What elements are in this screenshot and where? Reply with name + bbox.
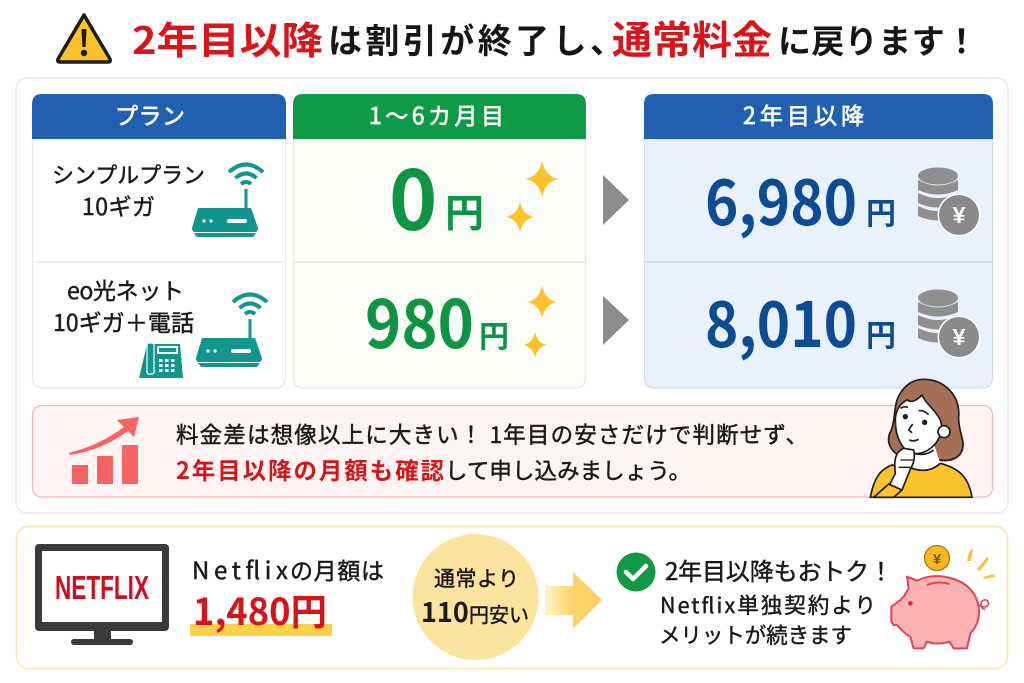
- arrow: first row: [603, 175, 629, 225]
- green header: [293, 94, 586, 139]
- panel: plan column: [32, 94, 993, 497]
- icon: thinking woman: [870, 379, 972, 497]
- icon: wifi router and phone: [139, 294, 267, 378]
- netflix price text: Netflix: [192, 551, 288, 586]
- netflix price text: 1,480円: [193, 582, 327, 636]
- highlight underline: [190, 624, 332, 636]
- netflix price text: [190, 551, 384, 636]
- blue header: 2年目以降: [743, 97, 864, 131]
- icon: green check: [616, 552, 656, 592]
- plan row: eo net: eo光ネット: [67, 272, 184, 306]
- benefit text: メリットが続きます: [659, 619, 852, 650]
- benefit text: 2年目以降もおトク！: [665, 552, 893, 587]
- icon: sparkles: [506, 161, 558, 232]
- price: 6,980 yen: 6,980: [705, 153, 857, 243]
- panel: second year column: [644, 94, 993, 388]
- callout: price gap warning: [32, 379, 992, 497]
- icon: warning triangle: [58, 15, 110, 62]
- plan header: [32, 94, 286, 139]
- icon: sparkles: [523, 286, 556, 358]
- panel: netflix: [16, 526, 1008, 668]
- icon: coins: [918, 290, 980, 358]
- plan row: eo net: 10ギガ＋電話: [53, 304, 194, 338]
- badge: 110 yen cheaper: 通常より: [434, 563, 519, 593]
- price: 980 yen: 円: [479, 312, 509, 356]
- netflix price text: の月額は: [290, 552, 384, 586]
- price: 6,980 yen: 円: [866, 189, 896, 233]
- benefit text: Netflix単独契約より: [660, 589, 876, 620]
- title text: 通常料金: [612, 10, 772, 66]
- callout text: [176, 418, 808, 486]
- plan row: simple plan: 10ギガ: [82, 188, 155, 222]
- price: 8,010 yen: 円: [866, 311, 896, 355]
- arrow: second row: [603, 296, 629, 345]
- title text: 2年目以降: [132, 10, 323, 65]
- icon: piggy bank: [891, 546, 995, 648]
- price: 0 yen: 円: [445, 183, 484, 239]
- price: 8,010 yen: 8,010: [705, 275, 857, 365]
- price: 0 yen: 0: [389, 135, 437, 254]
- badge: 110 yen cheaper: [412, 534, 538, 660]
- plan row: simple plan: [52, 158, 263, 237]
- title: [58, 10, 978, 66]
- title text: [132, 10, 978, 66]
- callout text: 料金差は想像以上に大きい！ 1年目の安さだけで判断せず、: [176, 418, 808, 450]
- badge: 110 yen cheaper: 110: [421, 591, 469, 630]
- badge: 110 yen cheaper: 円安い: [469, 599, 529, 628]
- plan header: プラン: [115, 97, 185, 131]
- plan row: simple plan: シンプルプラン: [52, 158, 205, 190]
- icon: piggy bank: ¥: [933, 551, 942, 568]
- green header: 1〜6カ月目: [369, 97, 504, 131]
- icon: rising bar chart: [69, 417, 139, 484]
- title text: に戻ります！: [778, 15, 978, 63]
- icon: coins: [918, 168, 980, 236]
- title text: は割引が終了し、: [328, 14, 624, 63]
- callout text: 2年目以降の月額も確認: [176, 452, 444, 486]
- icon: tv with netflix logo: NETFLIX: [55, 569, 149, 606]
- arrow: to benefit: [545, 572, 602, 629]
- price: 980 yen: 980: [365, 272, 474, 368]
- price: 0 yen: [389, 135, 484, 254]
- callout text: して申し込みましょう。: [445, 454, 691, 486]
- icon: tv with netflix logo: [35, 544, 169, 645]
- blue header: [644, 94, 993, 139]
- icon: wifi router: [192, 164, 263, 237]
- panel: first six months column: [293, 94, 586, 388]
- plan row: eo net: [53, 272, 267, 378]
- benefit text: [616, 552, 893, 650]
